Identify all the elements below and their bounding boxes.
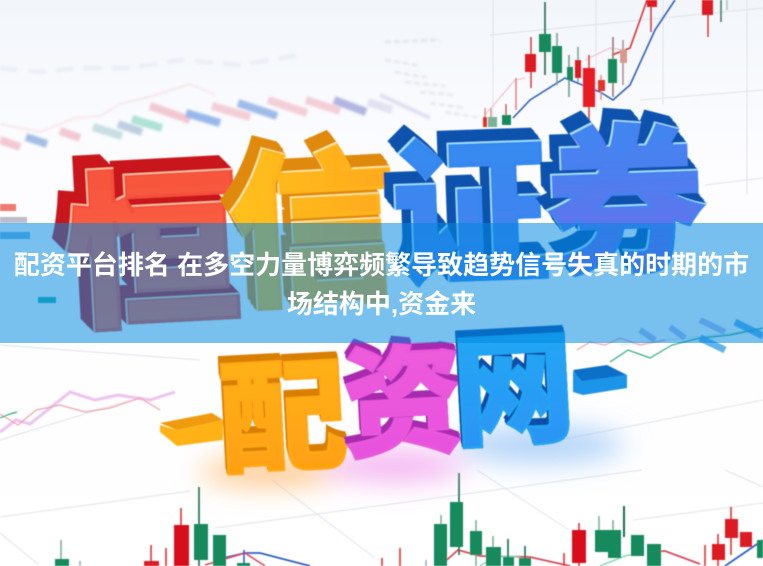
banner overlay <box>0 223 763 343</box>
line and bar chart: left middle <box>0 392 175 432</box>
logo word: 恒信证券 <box>58 72 709 365</box>
banner headline <box>14 250 749 319</box>
candles <box>544 2 546 75</box>
candlestick chart: top right <box>483 0 727 127</box>
headline line 1: 配资平台排名 在多空力量博弈频繁导致趋势信号失真的时期的市 <box>14 250 749 280</box>
letter: 网: 网 <box>448 290 579 473</box>
dash: left <box>160 413 223 446</box>
line and bar chart: right middle <box>577 320 763 362</box>
dash: right <box>573 365 627 395</box>
letter: 信: 信 <box>222 91 402 343</box>
candlestick chart: bottom <box>55 473 763 566</box>
letter: 券: 券 <box>541 72 709 309</box>
headline line 2: 场结构中,资金来 <box>287 289 476 319</box>
letter: 证: 证 <box>387 85 553 319</box>
faded bar chart: top left <box>0 100 392 147</box>
logo word: 配资网 <box>160 290 627 499</box>
faded side bars: left <box>0 204 56 303</box>
letter: 资: 资 <box>338 303 467 483</box>
floor glow under logo <box>200 427 625 484</box>
letter: 配: 配 <box>215 316 352 499</box>
faded line and labels: top <box>0 40 480 132</box>
letter: 恒: 恒 <box>58 111 246 365</box>
trend lines <box>513 0 675 118</box>
